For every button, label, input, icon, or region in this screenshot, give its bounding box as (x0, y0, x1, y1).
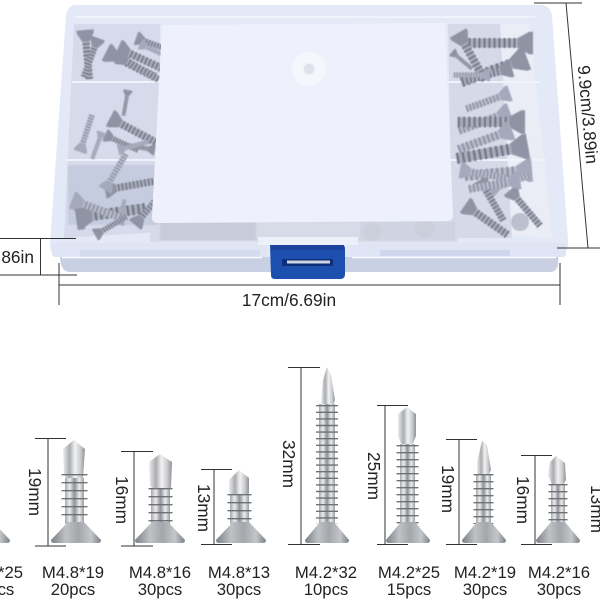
screw: M4.2*16: M4.2*16 (528, 563, 590, 582)
screws: middle-right compartment (451, 85, 530, 172)
screws: bottom strip (160, 218, 455, 241)
screw: M4.8*19 (25, 438, 104, 599)
right compartment shading (448, 24, 512, 238)
height dimension (0, 238, 77, 275)
screws: middle-left compartment (74, 89, 162, 162)
screw: M4.2*19 (438, 439, 516, 599)
screw: M4.2*19: 30pcs (463, 580, 507, 599)
storage box (50, 5, 568, 279)
screws: bottom-left compartment (68, 149, 170, 240)
box lid (50, 5, 568, 257)
lid label panel (152, 23, 453, 223)
screws in compartments (68, 28, 547, 243)
screws: top-right compartment (449, 28, 533, 94)
screw: M4.8*13 (194, 469, 270, 599)
screw: M4.8*13: M4.8*13 (208, 563, 270, 582)
screw: M4.2*32: 10pcs (304, 580, 348, 599)
screw: M4.2*25: 15pcs (387, 580, 431, 599)
screw: M4.2*32: M4.2*32 (295, 563, 357, 582)
box base (60, 255, 558, 272)
blue clasp (270, 245, 345, 279)
screw: M4.2*16: 16mm (513, 476, 533, 524)
screw: M4.2*25: 25mm (364, 452, 384, 500)
screw: M4.2*32 (279, 367, 357, 599)
width dimension: 17cm/6.69in (242, 290, 336, 310)
compartments interior (64, 24, 160, 238)
screw: M4.8*13: 30pcs (217, 580, 261, 599)
screws: bottom-right compartment (459, 158, 547, 243)
screw: M4.2*19: 19mm (438, 465, 458, 513)
screw: M4.8*19: 20pcs (51, 580, 95, 599)
screw: M4.8*25 (clipped) (0, 522, 23, 599)
screw: M4.8*19: M4.8*19 (42, 563, 104, 582)
width dimension (59, 263, 560, 310)
screw: M4.2*19: M4.2*19 (454, 563, 516, 582)
screw: M4.2*32: 32mm (279, 440, 299, 488)
screws: top-left compartment (76, 29, 176, 87)
screw: M4.8*13: 13mm (194, 484, 214, 532)
screw: M4.8*16: 30pcs (138, 580, 182, 599)
compartment dividers (66, 17, 546, 160)
screw: M4.2*25: M4.2*25 (378, 563, 440, 582)
screw: M4.2*25 (364, 405, 440, 599)
lid front band (52, 237, 566, 258)
screw: M4.2*16: 30pcs (537, 580, 581, 599)
screw: M4.8*16 (112, 451, 191, 599)
screw: M4.8*16: 16mm (112, 476, 132, 524)
screw: M4.8*16: M4.8*16 (129, 563, 191, 582)
screw: M4.2*16 (513, 455, 590, 599)
hinge hole in label (292, 52, 326, 86)
screw: M4.8*19: 19mm (25, 468, 45, 516)
depth dimension (534, 3, 600, 248)
